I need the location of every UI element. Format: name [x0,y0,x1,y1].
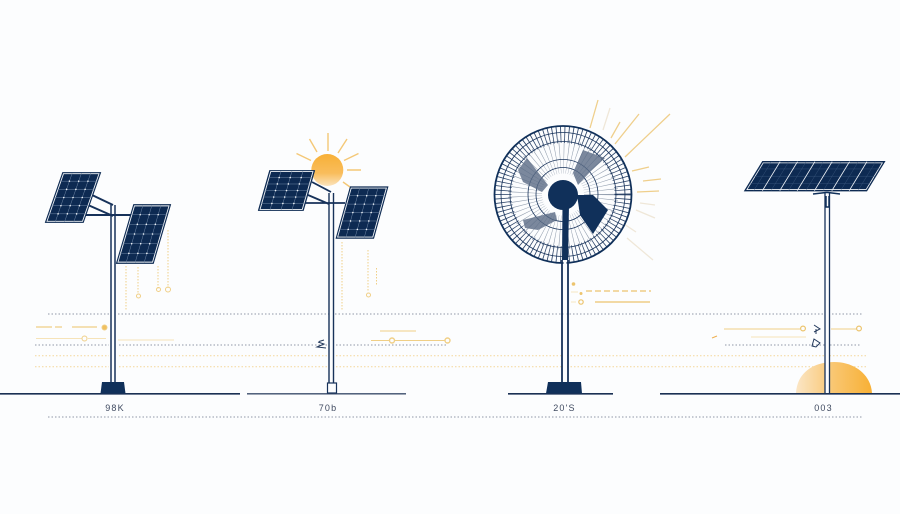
solar panel right 2 [337,187,387,238]
fan neck and pole [562,205,569,383]
grey fan blades [518,150,605,230]
yellow callouts 1 [36,230,174,341]
unit 1: twin-panel solar pole [36,173,174,413]
yellow callouts 3 [571,282,651,304]
arrow glyph 2 [317,340,326,348]
arrow glyphs 4 [812,325,820,347]
solar panel left 2 [259,171,314,210]
fan guard [494,126,632,263]
ground lines [0,393,900,395]
sun rays behind fan [590,100,670,260]
dark fan blade [577,195,608,234]
base 3 [546,382,582,394]
solar panel left 1 [46,173,100,222]
yellow callouts 4 [712,326,861,338]
label 003: 003 [814,403,833,413]
base 2 [328,383,336,393]
pole 4 [813,192,840,394]
dotted guide lines [35,314,866,417]
unit 2: solar pole with sun [259,133,450,413]
half sun [796,362,872,393]
solar panel right 1 [117,205,170,263]
pole 1 [86,195,131,385]
pole 2 [305,182,345,384]
solar panel 4 [745,162,884,191]
fan hub [548,180,578,210]
base 1 [100,382,126,394]
label 20'S: 20'S [553,403,576,413]
sun with rays [296,133,361,187]
unit 4: single tilted panel pole [712,162,884,413]
label 98K: 98K [105,403,125,413]
label 70b: 70b [319,403,337,413]
yellow callouts 2 [342,242,450,343]
unit 3: solar fan [494,100,670,413]
